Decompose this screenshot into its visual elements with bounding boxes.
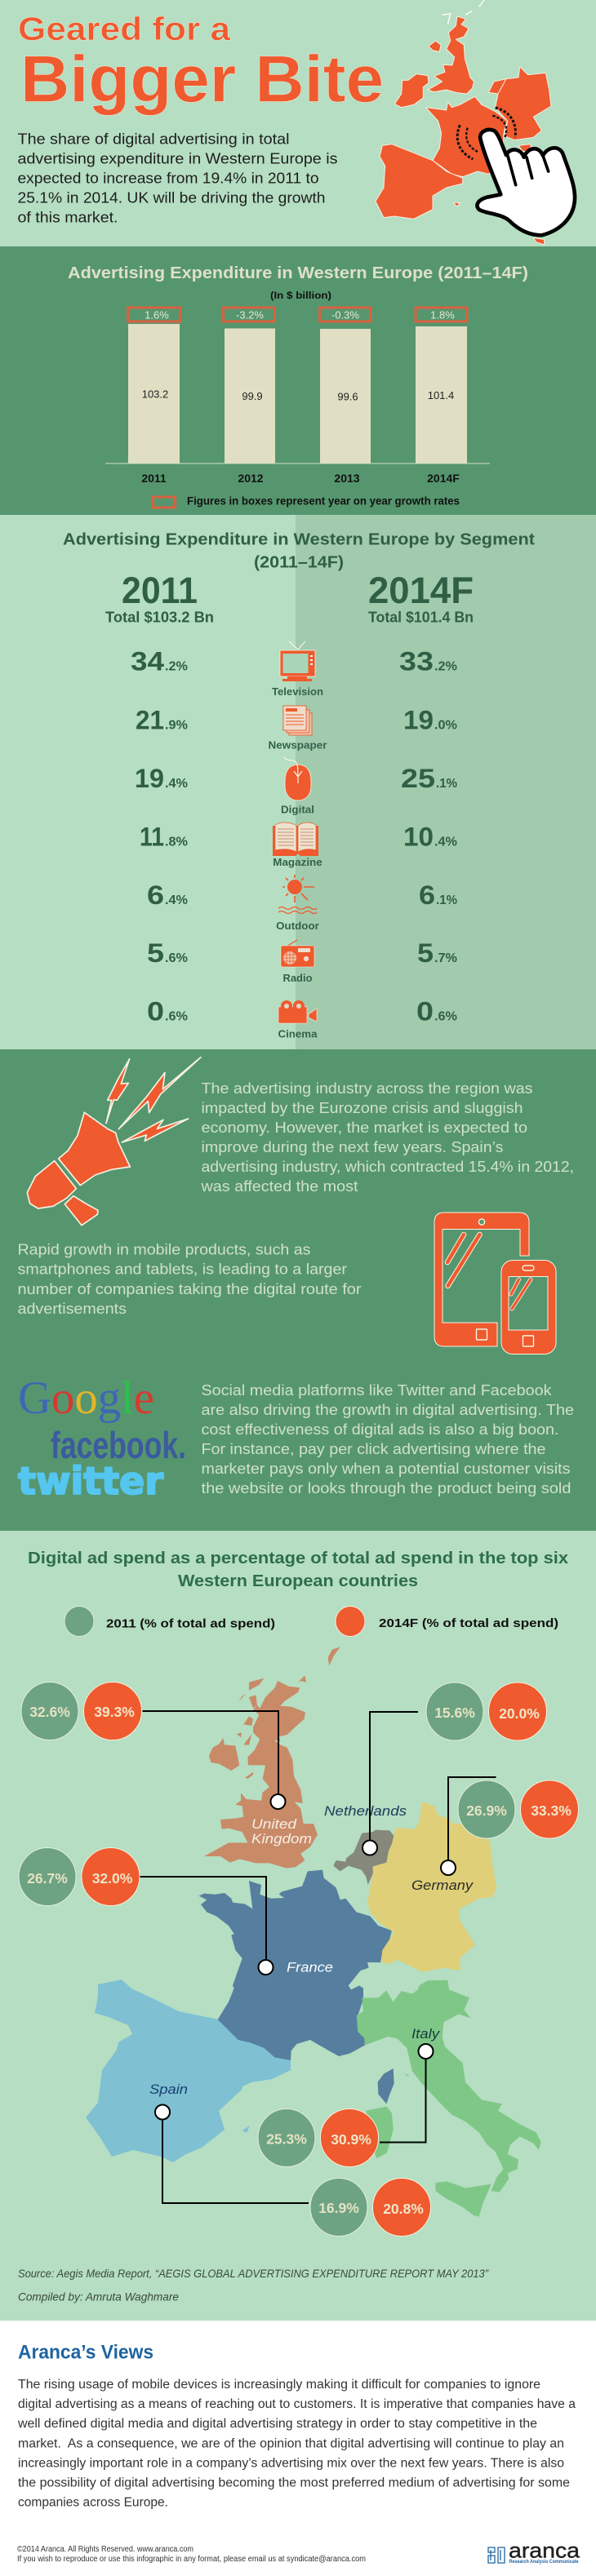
text: mobile growth (18, 1242, 362, 1317)
values 2011: 5 (147, 938, 164, 968)
callout: italy: 25.3% (266, 2131, 307, 2148)
callout: netherlands: 15.6% (434, 1705, 475, 1721)
icon: megaphone (27, 1057, 201, 1226)
country labels: France (287, 1960, 333, 1975)
text: social media: are also driving the growth in digital advertising. The (201, 1402, 574, 1418)
column head 2011: Total $103.2 Bn (105, 609, 214, 625)
country labels (149, 1803, 474, 2097)
values 2011: 34 (131, 647, 164, 676)
values 2014F: .7% (434, 951, 457, 965)
callout: france (19, 1847, 140, 1906)
map: france (196, 1870, 394, 2104)
title (18, 11, 384, 116)
values 2011: 19 (135, 764, 164, 793)
callout: spain (310, 2179, 431, 2236)
footer copyright: If you wish to reproduce or use this infographic in any format, please email us at syndicate@aranca.com (17, 2555, 366, 2564)
views body: The rising usage of mobile devices is increasingly making it difficult for companies to ignore (18, 2378, 540, 2392)
icon: cinema camera (278, 1000, 317, 1023)
panel: aranca's views (0, 2321, 596, 2576)
values 2014F: 5 (417, 938, 434, 968)
footer copyright: ©2014 Aranca. All Rights Reserved. www.aranca.com (17, 2545, 193, 2554)
values 2014F: 19 (403, 705, 434, 734)
logo: aranca (488, 2538, 580, 2565)
views body: market. As a consequence, we are of the opinion that digital advertising will continue to play an (18, 2436, 564, 2450)
values 2011: 11 (140, 822, 164, 852)
map legend: 2011 (% of total ad spend) (106, 1617, 275, 1631)
bar chart: 1.6% (145, 308, 169, 321)
country labels: Netherlands (324, 1803, 407, 1819)
map: spain (86, 1980, 291, 2162)
map heading: Digital ad spend as a percentage of total ad spend in the top six (28, 1549, 569, 1567)
bar chart (105, 308, 490, 485)
values 2014F: .1% (436, 777, 457, 791)
text: eurozone crisis: impacted by the Eurozone crisis and sluggish (201, 1100, 523, 1116)
bar chart: 101.4 (428, 389, 454, 401)
segment heading: Advertising Expenditure in Western Europe by Segment (63, 531, 535, 549)
intro text: expected to increase from 19.4% in 2011 to (18, 170, 318, 186)
views body: the possibility of digital advertising becoming the most preferred medium of advertising for some (18, 2476, 570, 2490)
values 2014F: 6 (419, 880, 435, 910)
bar chart: 99.9 (242, 390, 263, 402)
values 2011: 6 (147, 880, 164, 910)
label: radio: Radio (282, 972, 313, 984)
text: mobile growth: advertisements (18, 1301, 127, 1317)
text: social media (201, 1382, 574, 1496)
logos: google facebook twitter (18, 1372, 186, 1503)
icon: digital mouse (284, 757, 311, 800)
callout: france: 32.0% (92, 1870, 133, 1887)
column head 2011: 2011 (122, 570, 198, 611)
callout: germany (458, 1780, 578, 1838)
intro text: of this market. (18, 209, 118, 225)
intro text: The share of digital advertising in total (18, 130, 289, 147)
bar chart: -3.2% (236, 308, 264, 321)
views body: companies across Europe. (18, 2495, 168, 2510)
callout: france: 26.7% (27, 1870, 68, 1887)
map: italy (357, 1980, 541, 2217)
panel: drivers (0, 1049, 596, 1531)
panel: header (0, 0, 596, 246)
text: social media: marketer pays only when a potential customer visits (201, 1461, 570, 1477)
values 2011: .9% (165, 718, 188, 733)
values 2011: .6% (165, 951, 188, 965)
logos: google facebook twitter: twitter (18, 1459, 163, 1503)
text: mobile growth: number of companies taking the digital route for (18, 1281, 362, 1297)
panel: advertising expenditure chart (0, 246, 596, 515)
footer copyright (17, 2545, 366, 2564)
map pins (155, 1794, 456, 2120)
bar chart: 1.8% (430, 308, 455, 321)
title: Bigger Bite (20, 42, 384, 116)
views body (17, 2378, 576, 2510)
text: social media: the website or looks through the product being sold (201, 1480, 572, 1496)
logo: aranca: aranca (509, 2538, 580, 2562)
source notes: Compiled by: Amruta Waghmare (18, 2290, 179, 2303)
segment heading (63, 531, 535, 571)
text: mobile growth: smartphones and tablets, is leading to a larger (18, 1261, 347, 1278)
callout: netherlands (426, 1683, 547, 1740)
views heading: Aranca’s Views (18, 2342, 153, 2363)
map heading: Western European countries (178, 1572, 418, 1590)
views body: well defined digital media and digital advertising strategy in order to stay competitive in the (17, 2417, 537, 2431)
callout: spain: 16.9% (318, 2200, 359, 2216)
icon: magazine book (273, 822, 318, 856)
bar chart: 2013 (334, 472, 360, 485)
source notes (18, 2267, 489, 2303)
icon: outdoor sun and waves (278, 875, 317, 914)
label: digital: Digital (281, 803, 314, 815)
bar chart: 2011 (141, 472, 167, 485)
bar chart: 2012 (238, 472, 264, 485)
values 2014F: .6% (434, 1010, 457, 1024)
map: united kingdom (204, 1647, 340, 1868)
values 2011: .2% (165, 660, 188, 674)
segment heading: (2011–14F) (254, 553, 344, 571)
values 2014F: .0% (434, 718, 457, 733)
map: germany (367, 1802, 496, 1972)
values 2011: .4% (165, 893, 188, 907)
unit label: (In $ billion) (270, 290, 331, 301)
values 2014F: .4% (434, 836, 457, 849)
label: newspaper: Newspaper (268, 739, 327, 751)
callout: united kingdom: 32.6% (29, 1704, 70, 1720)
label: magazine: Magazine (273, 856, 322, 868)
values 2014F: 33 (399, 647, 434, 676)
values 2014F: 10 (403, 822, 434, 852)
logo: aranca: Research Analysis Communicate (509, 2560, 579, 2565)
views body: increasingly important role in a company’s advertising mix over the next few years. There is also (18, 2456, 564, 2470)
text: eurozone crisis (200, 1080, 574, 1195)
country labels: Spain (149, 2082, 188, 2097)
values 2014F: .2% (434, 660, 457, 674)
text: social media: For instance, pay per click advertising where the (201, 1441, 545, 1457)
country labels: Italy (411, 2026, 441, 2042)
country labels: Kingdom (251, 1831, 312, 1847)
map legend: 2014F (% of total ad spend) (379, 1616, 558, 1630)
text: social media: Social media platforms like Twitter and Facebook (201, 1382, 553, 1399)
icon: newspaper (283, 706, 312, 735)
title: Geared for a (18, 11, 231, 47)
values 2014F (399, 647, 457, 1026)
logos: google facebook twitter: facebook. (51, 1424, 186, 1466)
bar chart: 2014F (427, 472, 460, 485)
column head 2011 (105, 570, 214, 625)
callout: united kingdom (21, 1683, 142, 1740)
values 2011: .4% (165, 777, 188, 791)
bar chart: 103.2 (142, 388, 168, 400)
views body: digital advertising as a means of reaching out to customers. It is imperative that companies have a (18, 2397, 576, 2411)
chart legend: Figures in boxes represent year on year growth rates (187, 494, 460, 508)
icon: television (280, 641, 315, 681)
callout: germany: 26.9% (466, 1802, 507, 1819)
logos: google facebook twitter: Google (18, 1372, 154, 1424)
text: eurozone crisis: economy. However, the market is expected to (201, 1120, 527, 1136)
panel: digital ad spend map (0, 1531, 596, 2321)
map: netherlands (333, 1830, 394, 1885)
values 2011: 21 (136, 705, 164, 734)
values 2011: .6% (165, 1010, 188, 1024)
callout: united kingdom: 39.3% (94, 1704, 135, 1720)
values 2011 (131, 647, 188, 1026)
values 2014F: 0 (416, 997, 434, 1026)
text: eurozone crisis: The advertising industry across the region was (201, 1080, 532, 1097)
bar chart: -0.3% (331, 308, 359, 321)
intro text: 25.1% in 2014. UK will be driving the growth (18, 189, 325, 206)
values 2014F: .1% (436, 893, 457, 907)
bar chart: 99.6 (337, 390, 358, 403)
intro text (18, 130, 338, 225)
connector lines (140, 1711, 496, 2203)
column head 2014F: 2014F (368, 570, 474, 611)
label: television: Television (272, 685, 323, 698)
values 2014F: 25 (401, 764, 435, 793)
intro text: advertising expenditure in Western Europe is (18, 149, 338, 166)
country labels: Germany (411, 1878, 474, 1893)
map legend (64, 1606, 558, 1637)
icon: radio (281, 940, 314, 967)
map: western europe with hand pointer (376, 0, 575, 245)
country labels: United (251, 1816, 297, 1832)
values 2011: .8% (165, 836, 188, 849)
map heading (28, 1549, 569, 1590)
label: outdoor: Outdoor (276, 920, 319, 932)
callout: italy: 30.9% (331, 2131, 371, 2148)
values 2011: 0 (147, 997, 164, 1026)
source notes: Source: Aegis Media Report, “AEGIS GLOBAL ADVERTISING EXPENDITURE REPORT MAY 2013” (18, 2267, 489, 2280)
callout: italy (258, 2108, 379, 2167)
text: social media: cost effectiveness of digital ads is also a big boon. (201, 1421, 558, 1438)
text: eurozone crisis: was affected the most (200, 1178, 358, 1195)
column head 2014F: Total $101.4 Bn (368, 609, 474, 625)
callout: netherlands: 20.0% (499, 1705, 540, 1722)
text: eurozone crisis: advertising industry, which contracted 15.4% in 2012, (201, 1159, 574, 1175)
text: eurozone crisis: improve during the next few years. Spain’s (201, 1139, 503, 1155)
text: mobile growth: Rapid growth in mobile products, such as (18, 1242, 310, 1258)
callout: germany: 33.3% (531, 1802, 572, 1819)
panel: segment comparison (0, 515, 596, 1049)
icon: tablet and phone (434, 1213, 556, 1355)
chart heading: Advertising Expenditure in Western Europe (2011–14F) (68, 264, 528, 282)
callout: spain: 20.8% (383, 2201, 424, 2217)
label: cinema: Cinema (278, 1028, 318, 1040)
